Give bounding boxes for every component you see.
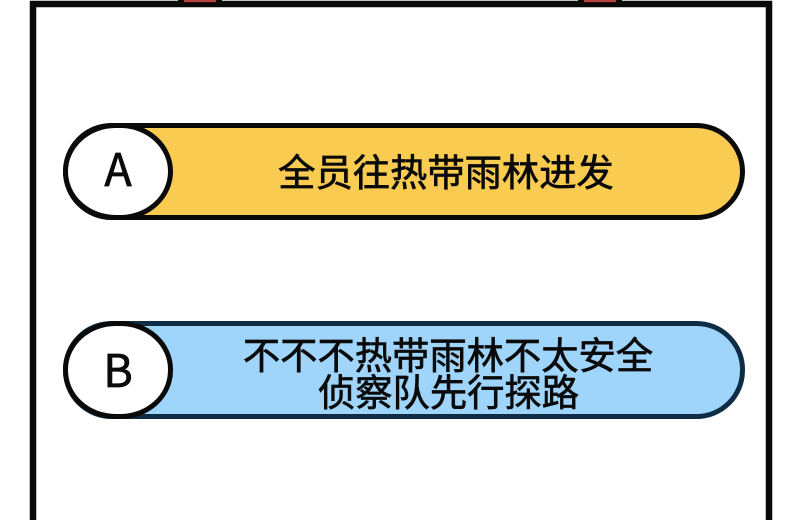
option A [66, 126, 742, 218]
option B text [243, 326, 653, 417]
option A badge [66, 126, 170, 218]
right red tab [578, 0, 622, 3]
option B letter: B [103, 335, 133, 400]
option A text: 全员往热带雨林进发 [278, 143, 614, 197]
option B badge [66, 324, 170, 416]
option B text: 侦察队先行探路 [318, 363, 579, 417]
option A pill [66, 126, 742, 218]
left red tab [178, 0, 222, 3]
option B [66, 324, 742, 417]
option B text: 不不不热带雨林不太安全 [243, 326, 653, 380]
option A letter: A [104, 134, 132, 199]
option B pill [66, 324, 742, 416]
